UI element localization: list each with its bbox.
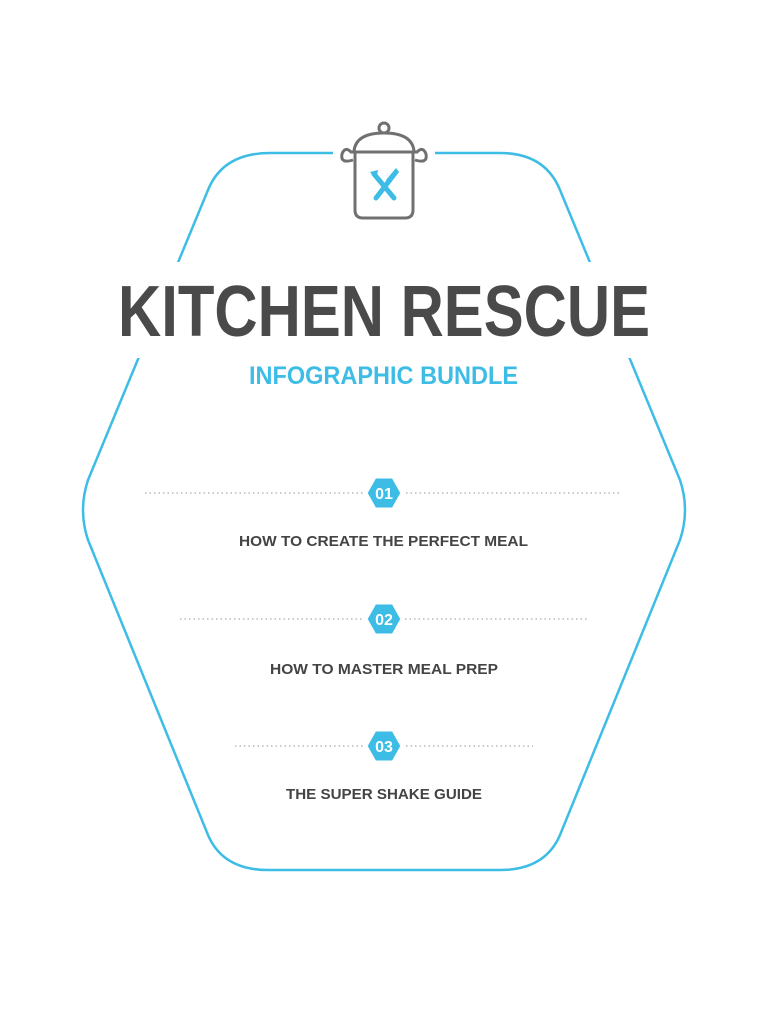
item 01: 01 — [375, 486, 393, 503]
item 02: 02 — [375, 612, 393, 629]
item 01: HOW TO CREATE THE PERFECT MEAL — [239, 533, 528, 550]
item 03: THE SUPER SHAKE GUIDE — [286, 786, 482, 803]
hexagon frame — [83, 140, 685, 870]
item 02 — [180, 603, 588, 678]
icon: cooking pot with fork and knife — [342, 123, 426, 218]
subtitle: INFOGRAPHIC BUNDLE — [249, 362, 518, 390]
item 03 — [235, 730, 533, 803]
title: KITCHEN RESCUE — [118, 272, 650, 352]
item 02: HOW TO MASTER MEAL PREP — [270, 661, 498, 678]
item 01 — [145, 477, 622, 550]
item 03: 03 — [375, 739, 393, 756]
